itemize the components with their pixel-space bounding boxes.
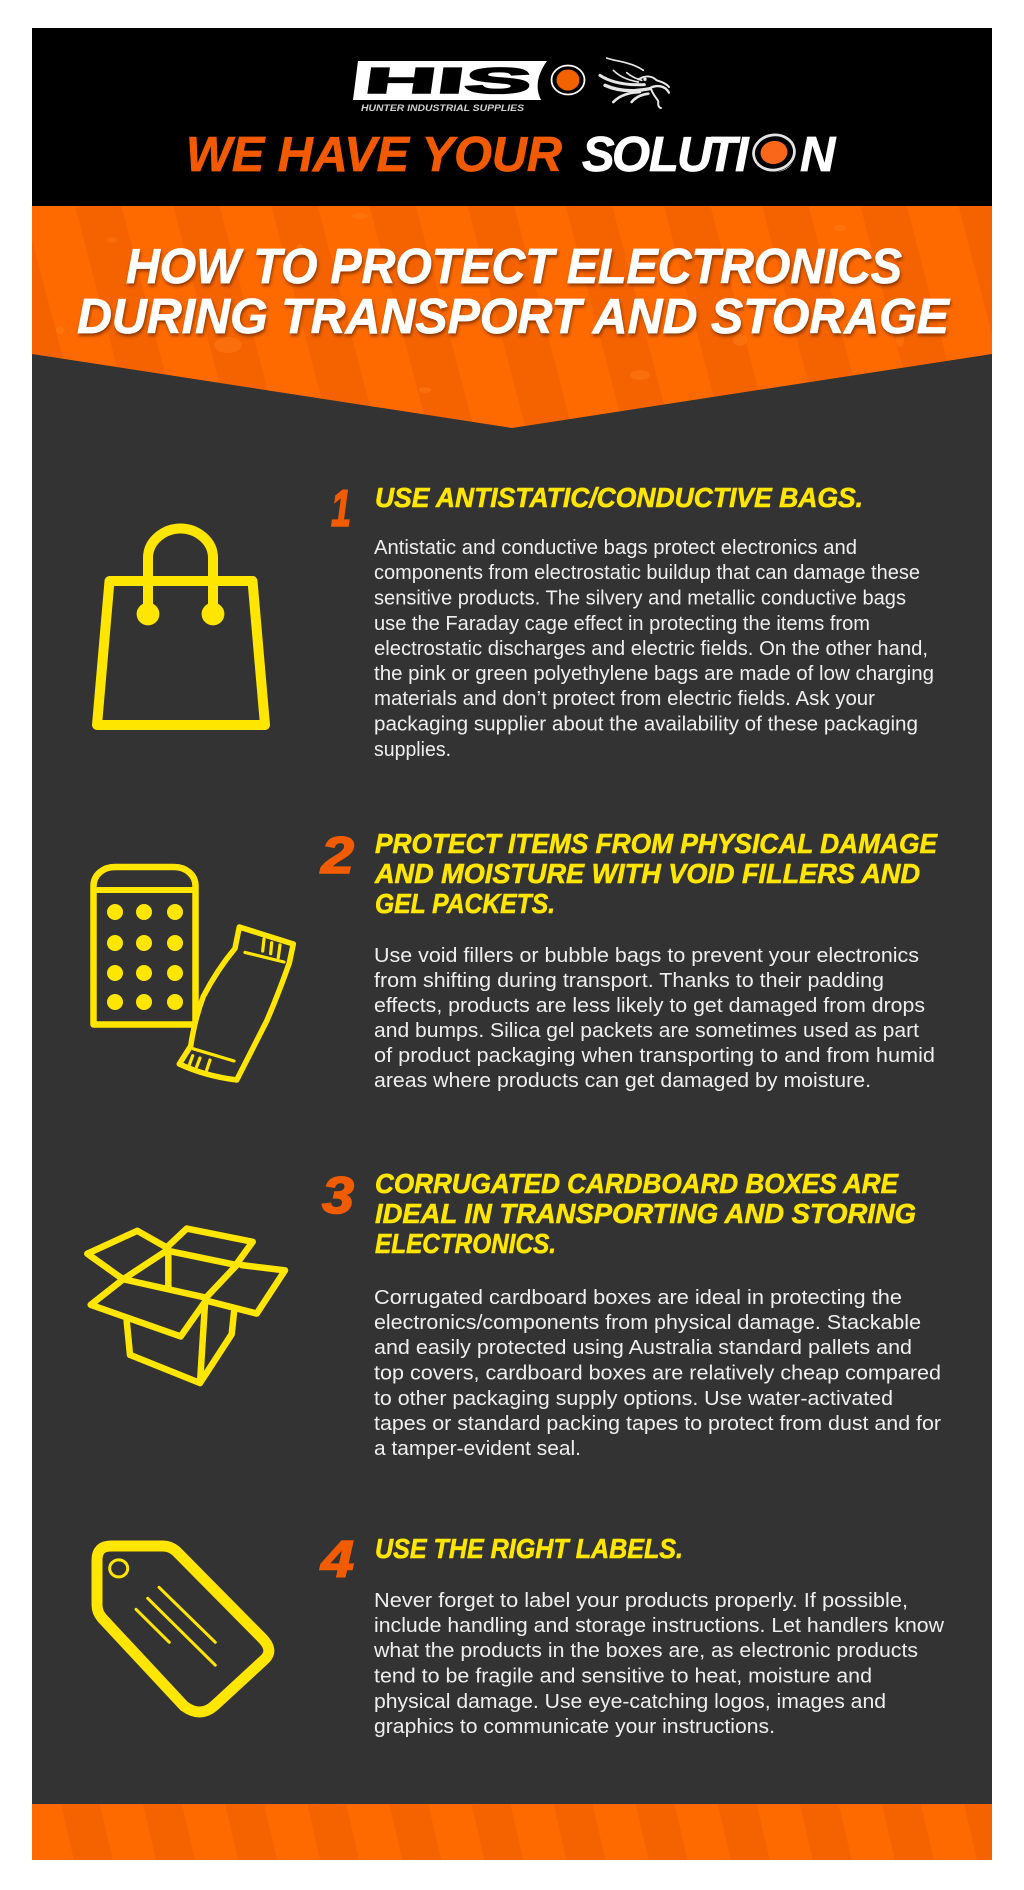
body text 2: and bumps. Silica gel packets are sometimes used as part [374, 1020, 919, 1042]
panel: orange title banner [32, 206, 992, 428]
body text 1: use the Faraday cage effect in protecting the items from [374, 613, 870, 635]
logo plate [353, 61, 547, 100]
icon: eagle head [600, 58, 669, 108]
icon: label tag [97, 1546, 269, 1712]
body text 1: sensitive products. The silvery and metallic conductive bags [374, 588, 906, 610]
body text 2: areas where products can get damaged by moisture. [374, 1070, 871, 1092]
body text 1: the pink or green polyethylene bags are made of low charging [374, 663, 934, 685]
section 4: right labels [97, 1531, 945, 1738]
panel: dark background [32, 200, 992, 1810]
body text 4: graphics to communicate your instructions. [374, 1716, 775, 1738]
body text 2: Use void fillers or bubble bags to prevent your electronics [374, 945, 919, 967]
body text 1 [374, 537, 934, 761]
body text 2: of product packaging when transporting to and from humid [374, 1045, 935, 1067]
heading 2 [374, 828, 938, 919]
panel: orange footer band [32, 1804, 992, 1860]
body text 3: tapes or standard packing tapes to protect from dust and for [374, 1413, 941, 1435]
logo: HIS Hunter Industrial Supplies [353, 58, 669, 114]
heading 4: USE THE RIGHT LABELS. [375, 1533, 683, 1564]
section 1: antistatic bags [97, 480, 934, 761]
body text 1: electrostatic discharges and electric fields. On the other hand, [374, 638, 928, 660]
heading 2: PROTECT ITEMS FROM PHYSICAL DAMAGE [375, 828, 938, 859]
tagline white part: SOLUTION [582, 128, 837, 182]
icon: shopping bag [97, 528, 265, 725]
body text 4: include handling and storage instructions. Let handlers know [374, 1615, 945, 1637]
number 3: 3 [322, 1167, 354, 1225]
body text 2: from shifting during transport. Thanks to their padding [374, 970, 884, 992]
section 2: void fillers and gel packets [94, 827, 938, 1092]
texture speckles [56, 213, 904, 393]
body text 4: what the products in the boxes are, as electronic products [373, 1640, 918, 1662]
heading 3: CORRUGATED CARDBOARD BOXES ARE [375, 1168, 899, 1199]
icon: open cardboard box [87, 1229, 285, 1383]
heading 3 [375, 1168, 916, 1259]
body text 3: top covers, cardboard boxes are relatively cheap compared [374, 1362, 941, 1384]
body text 2 [374, 945, 935, 1092]
body text 3: and easily protected using Australia standard pallets and [374, 1337, 912, 1359]
tagline orange part: WE HAVE YOUR [186, 128, 563, 182]
body text 3: a tamper-evident seal. [374, 1438, 581, 1460]
logo tagline: HUNTER INDUSTRIAL SUPPLIES [361, 103, 525, 114]
body text 1: materials and don’t protect from electric fields. Ask your [374, 688, 875, 710]
body text 2: effects, products are less likely to get damaged from drops [374, 995, 925, 1017]
heading 3: IDEAL IN TRANSPORTING AND STORING [375, 1198, 916, 1229]
body text 4 [373, 1590, 945, 1738]
section 3: corrugated boxes [87, 1167, 941, 1460]
logo ring [552, 66, 584, 94]
number 2: 2 [320, 827, 354, 885]
number 4: 4 [320, 1531, 354, 1589]
heading 3: ELECTRONICS. [375, 1228, 556, 1259]
heading 1: USE ANTISTATIC/CONDUCTIVE BAGS. [375, 482, 863, 513]
heading 2: AND MOISTURE WITH VOID FILLERS AND [374, 858, 920, 889]
icon: bubble bag and gel packet [94, 867, 293, 1080]
tagline: we have your solution [186, 128, 837, 182]
main title [77, 240, 950, 344]
body text 3: Corrugated cardboard boxes are ideal in protecting the [374, 1287, 902, 1309]
icon: orange ring letter O [748, 129, 800, 176]
body text 4: Never forget to label your products properly. If possible, [374, 1590, 908, 1612]
panel: black header [32, 28, 992, 206]
body text 1: supplies. [374, 739, 451, 761]
number 1: 1 [331, 480, 351, 538]
body text 3 [374, 1287, 941, 1460]
body text 3: electronics/components from physical damage. Stackable [374, 1312, 921, 1334]
body text 4: physical damage. Use eye-catching logos, images and [374, 1691, 886, 1713]
logo letters: HIS [362, 60, 535, 101]
body text 1: components from electrostatic buildup that can damage these [374, 562, 920, 584]
main title: HOW TO PROTECT ELECTRONICS [126, 240, 902, 294]
body text 1: packaging supplier about the availability of these packaging [374, 714, 918, 736]
body text 1: Antistatic and conductive bags protect electronics and [374, 537, 857, 559]
body text 3: to other packaging supply options. Use water-activated [374, 1388, 893, 1410]
heading 2: GEL PACKETS. [375, 888, 555, 919]
main title: DURING TRANSPORT AND STORAGE [77, 290, 950, 344]
body text 4: tend to be fragile and sensitive to heat, moisture and [374, 1666, 872, 1688]
